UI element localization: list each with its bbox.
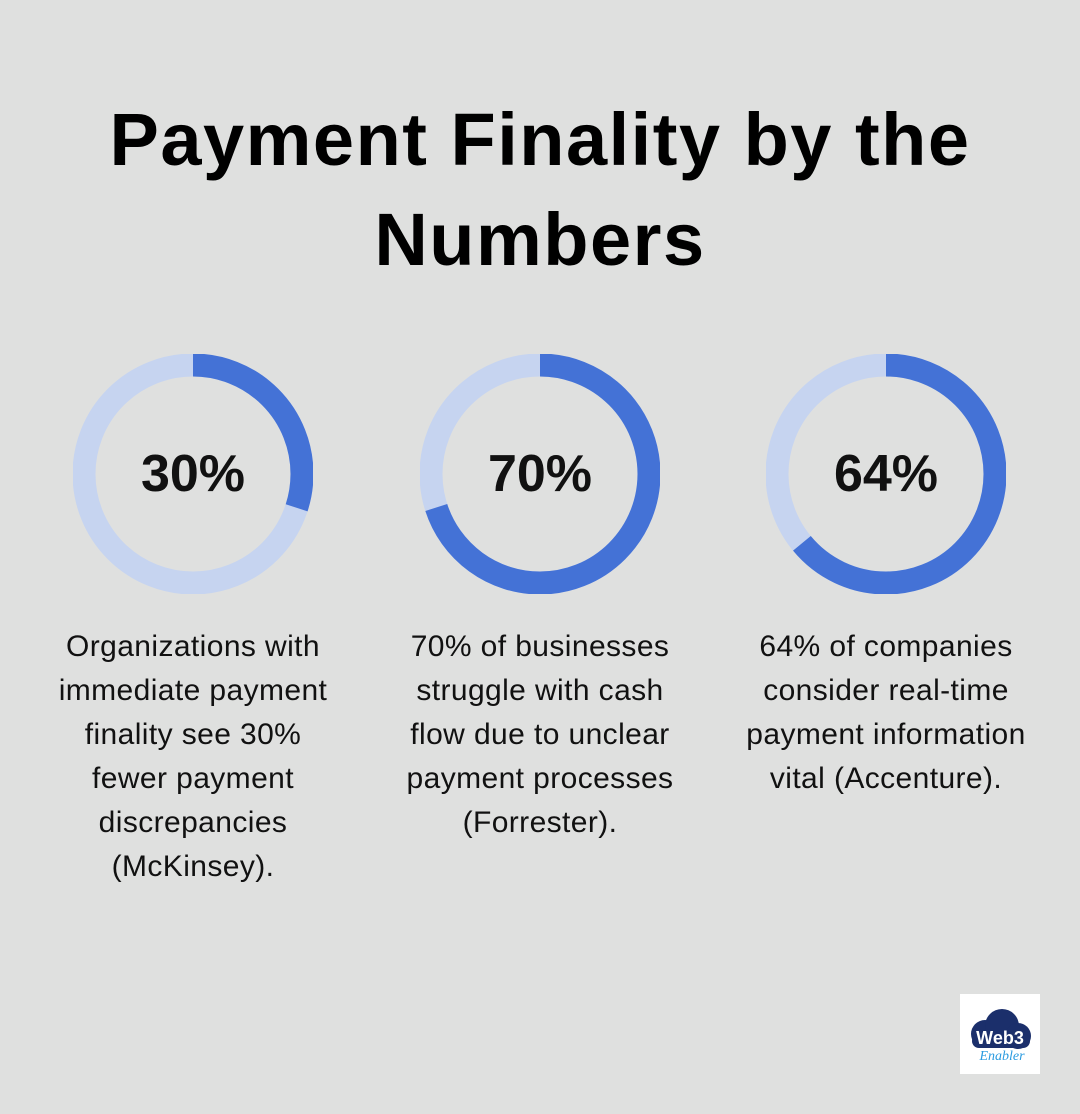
- text: caption 2: [407, 630, 673, 839]
- text: caption 3: payment information: [746, 718, 1026, 751]
- logo: Enabler: [978, 1049, 1025, 1064]
- donut: 64%: [766, 354, 1006, 594]
- title: Payment Finality by the: [109, 98, 971, 181]
- text: caption 1: [59, 630, 327, 883]
- donut: 64%: 64%: [834, 445, 938, 503]
- text: caption 1: immediate payment: [59, 674, 327, 707]
- text: caption 3: consider real-time: [763, 674, 1009, 707]
- text: caption 1: Organizations with: [66, 630, 320, 663]
- donut: 70%: [420, 354, 660, 594]
- text: caption 2: 70% of businesses: [411, 630, 669, 663]
- donut: 70%: 70%: [488, 445, 592, 503]
- donut: 30%: 30%: [141, 445, 245, 503]
- donut: 30%: [73, 354, 313, 594]
- text: caption 1: (McKinsey).: [112, 850, 274, 883]
- text: caption 3: vital (Accenture).: [770, 762, 1002, 795]
- text: caption 1: finality see 30%: [85, 718, 301, 751]
- text: caption 2: payment processes: [407, 762, 673, 795]
- text: caption 2: struggle with cash: [416, 674, 664, 707]
- title: [109, 98, 971, 281]
- text: caption 3: [746, 630, 1026, 795]
- logo: [960, 994, 1040, 1074]
- text: caption 1: fewer payment: [92, 762, 294, 795]
- text: caption 2: flow due to unclear: [410, 718, 670, 751]
- text: caption 2: (Forrester).: [463, 806, 617, 839]
- text: caption 1: discrepancies: [99, 806, 287, 839]
- text: caption 3: 64% of companies: [759, 630, 1013, 663]
- logo: Web3: [976, 1028, 1024, 1048]
- title: Numbers: [374, 198, 706, 281]
